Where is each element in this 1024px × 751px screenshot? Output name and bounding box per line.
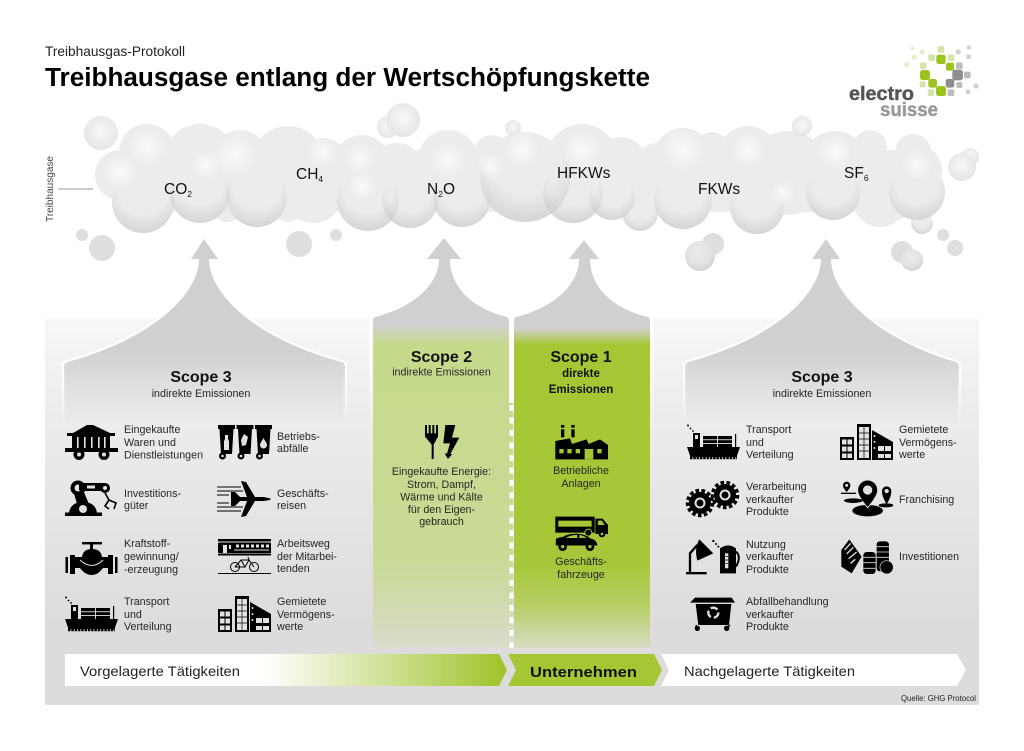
text: Gemietete Vermoegenswerte: Vermögens-: [277, 609, 335, 621]
label: Vorgelagerte Tätigkeiten: [80, 663, 240, 679]
text: Geschaeftsfahrzeuge: Geschäfts-: [555, 556, 607, 568]
icon: cargo ship: [687, 424, 740, 458]
text: Arbeitsweg der Mitarbeitenden: Arbeitsweg: [277, 538, 330, 550]
text: Eingekaufte Energie: gebrauch: [419, 516, 464, 528]
icon: map pins: [841, 480, 893, 516]
text: Transport und Verteilung: Verteilung: [124, 621, 172, 633]
gas label N2O: O: [443, 181, 455, 198]
cloud base mass: [95, 124, 945, 234]
cloud soft shading at the bottom: [112, 132, 945, 234]
logo word suisse: suisse: [880, 100, 938, 121]
text: Betriebliche Anlagen: Betriebliche: [553, 465, 609, 477]
text: Gemietete Vermoegenswerte: werte: [898, 449, 925, 461]
gas label N2O: 2: [438, 189, 443, 199]
text: Geschaeftsreisen: reisen: [277, 500, 306, 512]
text: Abfallbehandlung verkaufter Produkte: verkaufter: [746, 609, 794, 621]
panel: Scope 1: [514, 240, 650, 648]
text: Gemietete Vermoegenswerte: werte: [276, 621, 303, 633]
subheading: direkte Emissionen: Emissionen: [549, 384, 613, 396]
logo: electrosuisse: [849, 46, 978, 121]
icon: money and coins: [841, 539, 893, 574]
panel: Scope 3 upstream: [64, 239, 345, 633]
icon: truck and car: [555, 517, 608, 551]
icon: recycling bin: [690, 598, 735, 631]
logo mark: [904, 46, 978, 96]
panel: Scope 3 downstream: [685, 239, 959, 633]
text: Nutzung verkaufter Produkte: Nutzung: [746, 539, 786, 551]
icon: cargo ship: [65, 596, 118, 630]
text: Verarbeitung verkaufter Produkte: Verarbeitung: [746, 481, 807, 493]
gas label SF6: SF: [844, 165, 864, 182]
gas label CH4: CH: [296, 166, 318, 183]
text: Nutzung verkaufter Produkte: Produkte: [746, 564, 789, 576]
text: Nutzung verkaufter Produkte: verkaufter: [746, 551, 794, 563]
text: Eingekaufte Waren und Dienstleistungen: Eingekaufte: [124, 424, 180, 436]
subheading: indirekte Emissionen: [773, 388, 871, 400]
icon: coal wagon: [65, 425, 118, 460]
icon: robot arm: [65, 480, 116, 516]
text: Geschaeftsreisen: Geschäfts-: [277, 488, 329, 500]
text: Verarbeitung verkaufter Produkte: Produkte: [746, 506, 789, 518]
text: Kraftstoffgewinnung: Kraftstoff-: [124, 538, 170, 550]
lower droplets: [76, 229, 963, 271]
icon: plug and lightning: [425, 425, 459, 459]
subheading: indirekte Emissionen: [392, 366, 491, 378]
text: Franchising: Franchising: [899, 494, 954, 506]
icon: gears: [688, 482, 738, 516]
text: Transport und Verteilung: und: [124, 609, 142, 621]
text: Betriebliche Anlagen: Anlagen: [561, 478, 601, 490]
heading: Scope 2: Scope 2: [411, 349, 472, 366]
text: Investitionsgueter: güter: [124, 500, 149, 512]
leader line: [58, 188, 93, 190]
text: Investitionsgueter: Investitions-: [124, 488, 181, 500]
text: Eingekaufte Waren und Dienstleistungen: Waren und: [124, 437, 176, 449]
heading: Scope 3: Scope 3: [791, 369, 853, 386]
text: Betriebsabfaelle: Betriebs-: [277, 431, 320, 443]
text: Eingekaufte Energie: für den Eigen-: [408, 504, 476, 516]
text: Transport und Verteilung: Transport: [124, 596, 169, 608]
text: Gemietete Vermoegenswerte: Gemietete: [899, 424, 948, 436]
upper droplets: [84, 103, 979, 181]
icon: waste bins: [218, 425, 272, 460]
subheading: indirekte Emissionen: [152, 388, 250, 400]
title: Treibhausgase entlang der Wertschöpfungskette: [45, 64, 650, 92]
gas label CO2: 2: [187, 189, 192, 199]
heading: Scope 1: Scope 1: [550, 349, 612, 366]
arrow: Scope 3 left: [64, 239, 345, 425]
cloud of greenhouse gases: [76, 103, 979, 271]
icon: factory: [555, 425, 608, 459]
side label: Treibhausgase: Treibhausgase: [45, 156, 56, 222]
value chain arrow: Vorgelagerte Taetigkeiten: [65, 654, 507, 686]
value chain arrow: Nachgelagerte Taetigkeiten: [661, 654, 966, 686]
text: Investitionen: Investitionen: [899, 551, 959, 563]
text: Eingekaufte Energie: Eingekaufte Energie:: [392, 466, 491, 478]
text: Gemietete Vermoegenswerte: Gemietete: [277, 596, 326, 608]
text: Gemietete Vermoegenswerte: Vermögens-: [899, 437, 957, 449]
text: Betriebsabfaelle: abfälle: [277, 443, 309, 455]
panel: Scope 2: [373, 238, 513, 648]
cloud highlights: [102, 127, 933, 206]
text: Kraftstoffgewinnung: -erzeugung: [124, 564, 178, 576]
label: Nachgelagerte Tätigkeiten: [684, 663, 855, 679]
dashed company boundary: [510, 405, 514, 648]
label: Unternehmen: [530, 664, 637, 681]
source note: Quelle: GHG Protocol: [901, 694, 976, 703]
gas label SF6: 6: [864, 173, 869, 183]
gas label CO2: CO: [164, 181, 187, 198]
text: Arbeitsweg der Mitarbeitenden: tenden: [277, 563, 310, 575]
subtitle: Treibhausgas-Protokoll: [45, 44, 185, 59]
gas label CH4: 4: [318, 174, 323, 184]
text: Transport und Verteilung: Transport: [746, 424, 791, 436]
gas label FKWs: FKWs: [698, 181, 740, 198]
text: Abfallbehandlung verkaufter Produkte: Abfallbehandlung: [746, 596, 829, 608]
text: Transport und Verteilung: Verteilung: [746, 449, 794, 461]
text: Arbeitsweg der Mitarbeitenden: der Mitarbei-: [277, 551, 337, 563]
arrow and column: Scope 2: [373, 238, 513, 648]
text: Geschaeftsfahrzeuge: fahrzeuge: [557, 569, 605, 581]
gas label HFKWs: HFKWs: [557, 165, 611, 182]
arrow: Scope 3 right: [685, 239, 959, 425]
text: Eingekaufte Energie: Strom, Dampf,: [407, 479, 476, 491]
text: Verarbeitung verkaufter Produkte: verkaufter: [746, 494, 794, 506]
arrow and column: Scope 1: [514, 240, 650, 648]
text: Eingekaufte Waren und Dienstleistungen: Dienstleistungen: [124, 450, 203, 462]
main panel background: [45, 318, 979, 705]
value chain arrow: Unternehmen: [508, 654, 662, 686]
text: Eingekaufte Energie: Wärme und Kälte: [400, 492, 483, 504]
icon: train and bicycle: [218, 539, 271, 574]
subheading: direkte Emissionen: direkte: [562, 368, 600, 380]
logo word electro: electro: [849, 84, 914, 105]
text: Transport und Verteilung: und: [746, 437, 764, 449]
icon: lamp and kettle: [686, 539, 739, 574]
icon: rented buildings: [840, 424, 893, 460]
heading: Scope 3: Scope 3: [170, 369, 232, 386]
text: Kraftstoffgewinnung: gewinnung/: [124, 551, 179, 563]
white side gaps of the scope columns: [369, 318, 654, 438]
icon: airplane: [217, 481, 271, 517]
icon: rented buildings: [218, 596, 271, 632]
icon: pipeline valve: [66, 542, 118, 575]
text: Abfallbehandlung verkaufter Produkte: Produkte: [746, 621, 789, 633]
gas label N2O: N: [427, 181, 438, 198]
